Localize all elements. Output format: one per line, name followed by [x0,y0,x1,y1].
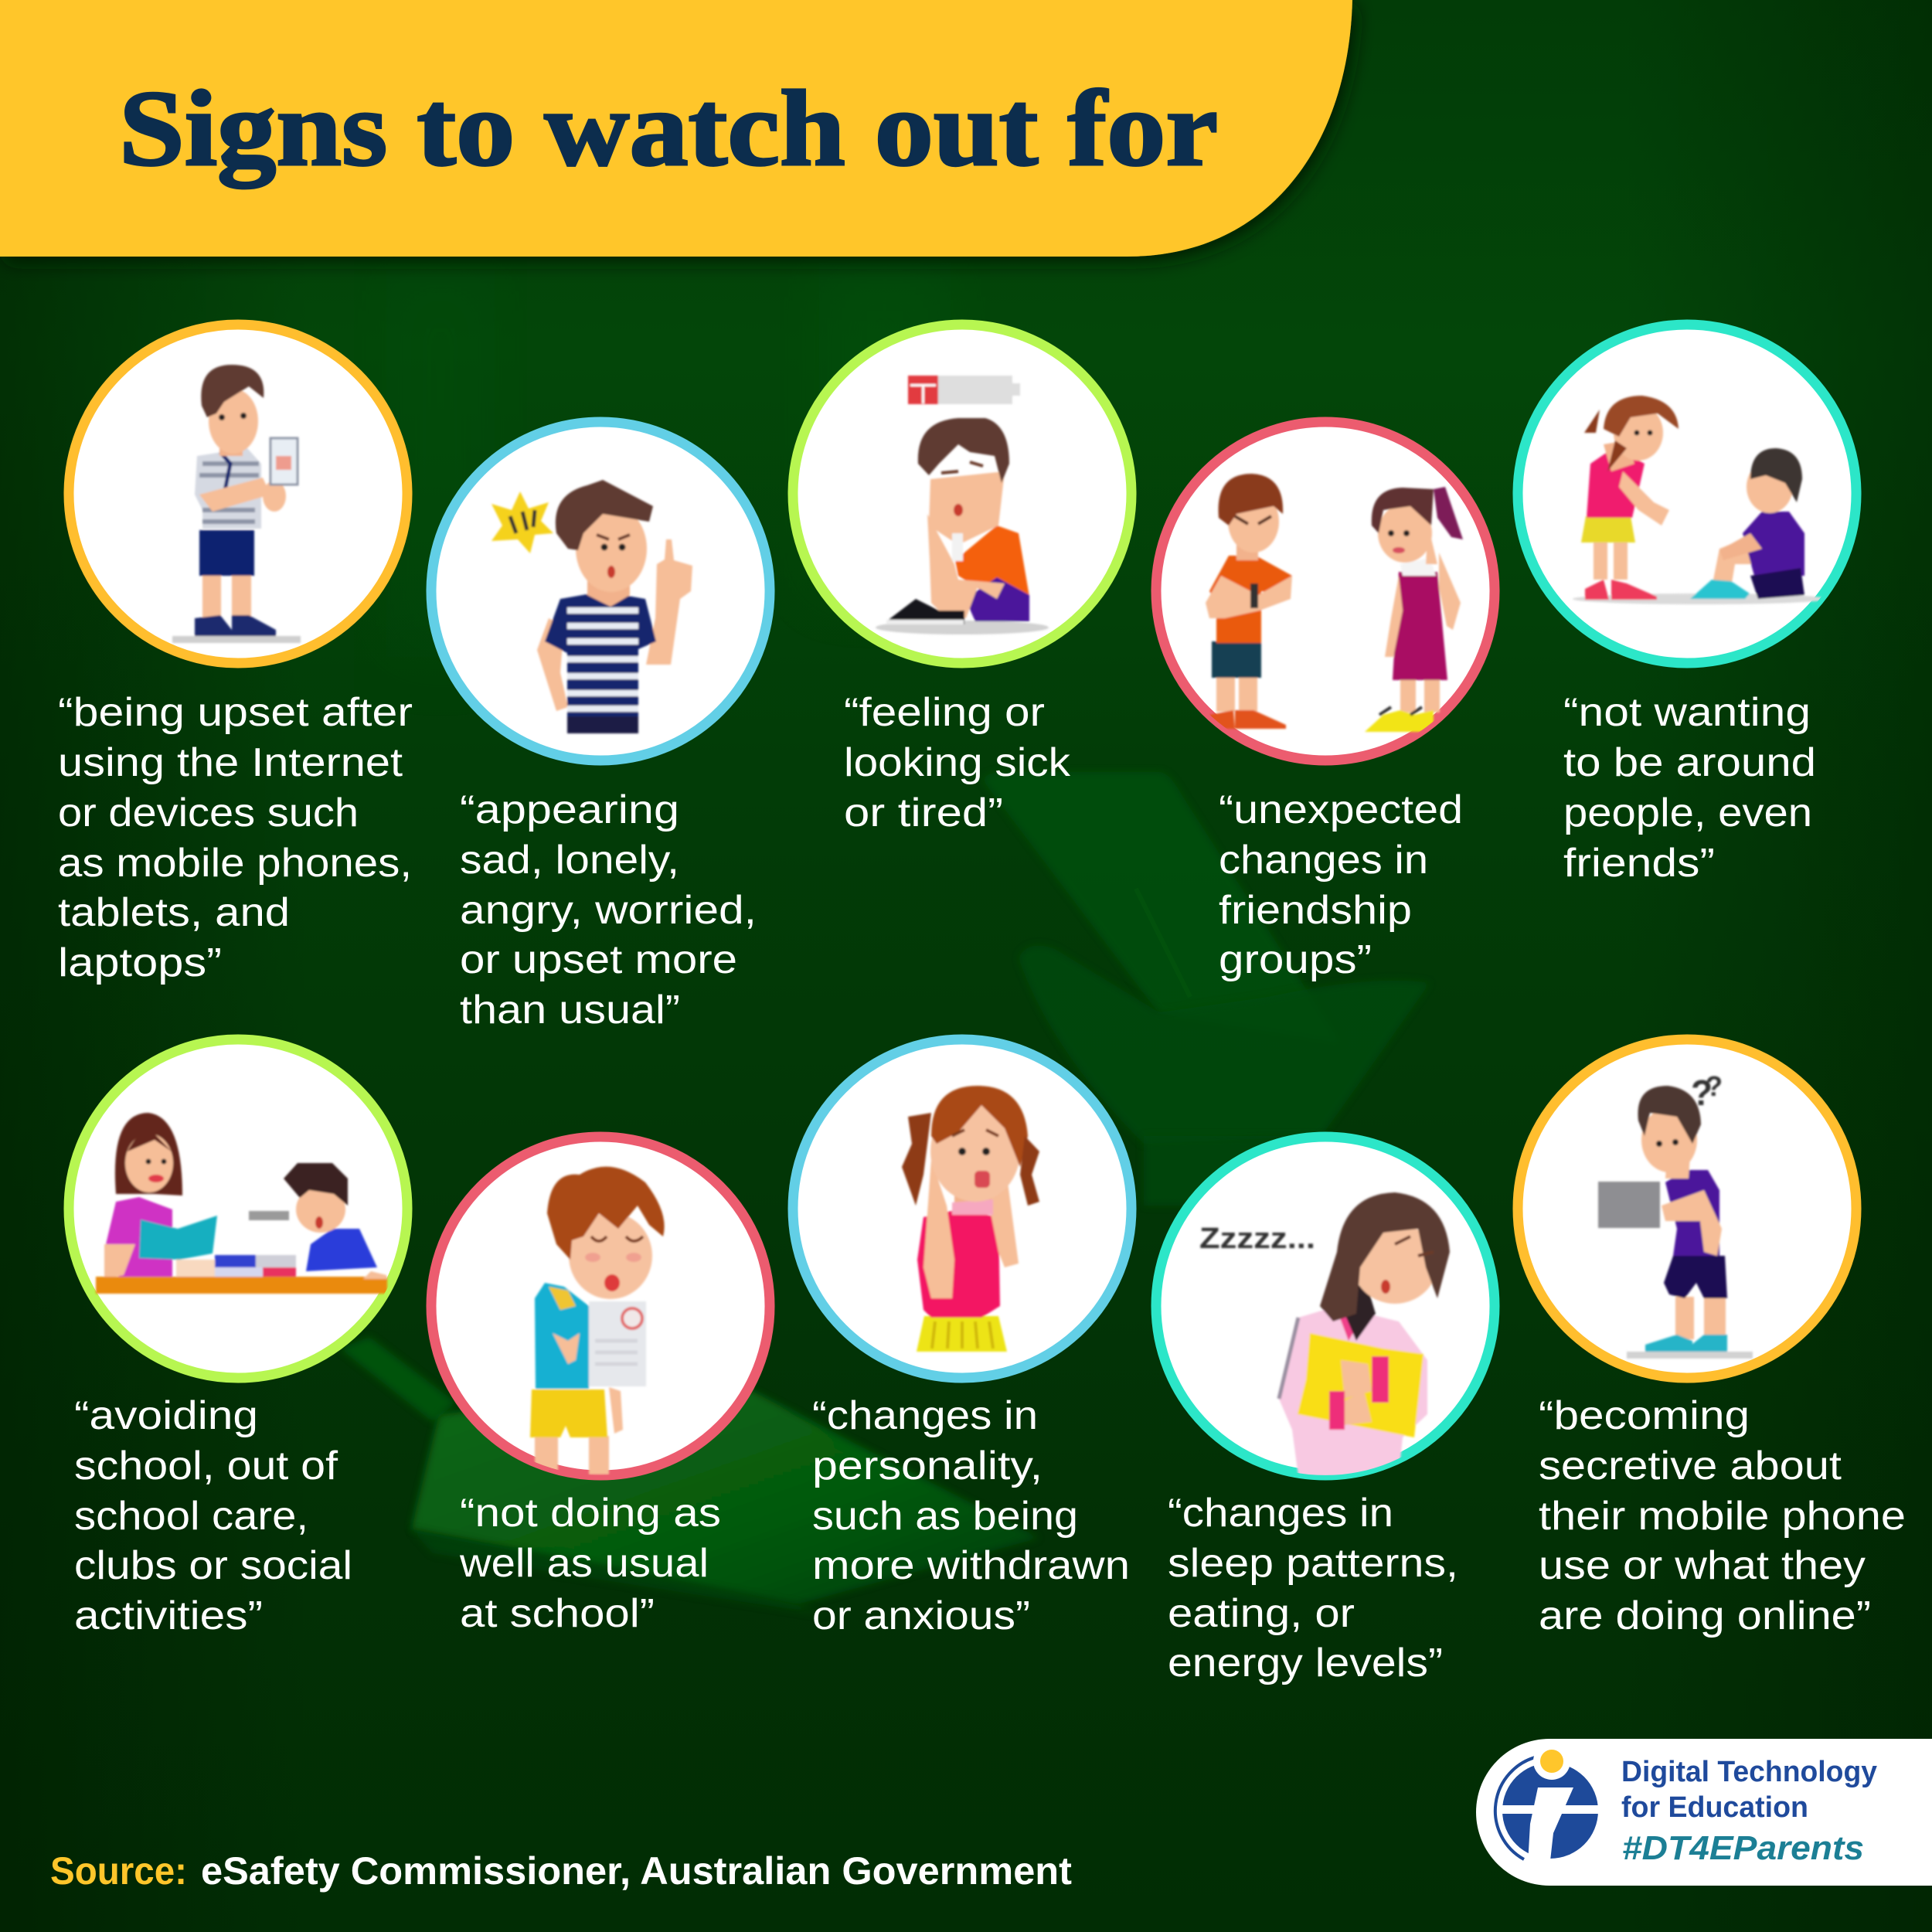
circle frame [1156,1137,1495,1475]
caption: “avoiding [74,1393,258,1438]
caption: sleep patterns, [1168,1541,1458,1586]
illustration: sad boy with test paper [530,1167,665,1475]
caption: activities” [74,1594,263,1638]
panel: not wanting to be around people [1518,325,1856,886]
caption: at school” [460,1591,655,1636]
illustration: boy hiding tablet [1598,1070,1753,1359]
caption: well as usual [459,1541,709,1586]
caption: or tired” [844,791,1003,835]
illustration: girl and sitting boy [1573,396,1828,604]
panel: feeling sick [793,325,1131,835]
panel: changes in personality [793,1039,1131,1638]
illustration: anxious girl [902,1086,1039,1352]
caption: or anxious” [812,1594,1030,1638]
source line: Source: [50,1849,187,1893]
caption: angry, worried, [460,888,757,933]
logo text: for Education [1621,1791,1808,1824]
circle frame [1518,1039,1856,1378]
caption: school care, [74,1494,308,1539]
caption: energy levels” [1168,1641,1443,1685]
panel: appearing sad [431,422,770,1032]
circle frame [431,422,770,760]
caption: “becoming [1539,1393,1750,1438]
caption: using the Internet [58,740,403,785]
icon: DT4E logo [1495,1743,1600,1864]
panel: becoming secretive [1518,1039,1906,1638]
illustration: tired boy with low battery [876,376,1049,634]
logo text: #DT4EParents [1622,1829,1864,1867]
caption: to be around [1563,740,1816,785]
circle frame [69,1039,407,1378]
caption: “appearing [460,787,679,832]
caption: “changes in [812,1393,1038,1438]
illustration: sleepy girl with pillow: Zzzzz... [1199,1223,1315,1255]
source line: eSafety Commissioner, Australian Government [201,1849,1072,1893]
caption: “feeling or [844,690,1045,735]
illustration: sleepy girl with pillow [1199,1192,1450,1476]
illustration: woman and boy at desk [96,1113,387,1294]
caption [58,690,413,985]
caption: personality, [812,1444,1043,1488]
caption [459,1491,721,1636]
caption: sad, lonely, [460,838,679,883]
caption: use or what they [1539,1543,1866,1588]
circle frame [69,325,407,663]
caption [844,690,1071,835]
logo text [1621,1756,1877,1867]
logo badge [1476,1739,1932,1886]
illustration: boy hiding tablet: ? [1691,1073,1713,1113]
caption [1563,690,1816,886]
caption [74,1393,352,1638]
caption: “unexpected [1219,787,1463,832]
circle frame [431,1137,770,1475]
illustration: boy and girl [1206,474,1463,732]
illustration: boy hiding tablet: ? [1706,1070,1723,1102]
panel: avoiding school [69,1039,407,1638]
panel: not doing as well [431,1137,770,1636]
caption: their mobile phone [1539,1494,1906,1539]
caption [1539,1393,1906,1638]
caption: more withdrawn [812,1543,1130,1588]
caption: “being upset after [58,690,413,735]
caption: laptops” [58,940,222,985]
illustration: boy looking at phone [172,365,301,643]
caption: are doing online” [1539,1594,1871,1638]
caption: “not wanting [1563,690,1811,735]
caption: tablets, and [58,890,290,935]
circle frame [793,325,1131,663]
caption: or devices such [58,791,359,835]
caption: friends” [1563,841,1715,886]
caption: than usual” [460,988,680,1032]
panel: being upset [58,325,413,985]
caption: friendship [1219,888,1412,933]
illustration: angry boy with raised finger [492,480,692,733]
logo text: Digital Technology [1621,1756,1877,1788]
panel: friendship groups [1156,422,1495,982]
caption [1168,1491,1458,1685]
caption: looking sick [844,740,1071,785]
circle frame [793,1039,1131,1378]
caption: “not doing as [460,1491,721,1536]
caption: secretive about [1539,1444,1842,1488]
caption [1219,787,1463,982]
caption: as mobile phones, [58,841,412,886]
caption: or upset more [460,937,737,982]
caption: eating, or [1168,1591,1355,1636]
caption [812,1393,1130,1638]
caption: people, even [1563,791,1812,835]
caption: changes in [1219,838,1428,883]
caption: “changes in [1168,1491,1393,1536]
caption: school, out of [74,1444,338,1488]
panel: changes in sleep [1156,1137,1495,1685]
caption: clubs or social [74,1543,352,1588]
caption [460,787,757,1032]
banner [0,0,1352,257]
caption: groups” [1219,937,1372,982]
title: Signs to watch out for [119,69,1218,189]
circle frame [1156,422,1495,760]
caption: such as being [812,1494,1078,1539]
circle frame [1518,325,1856,663]
